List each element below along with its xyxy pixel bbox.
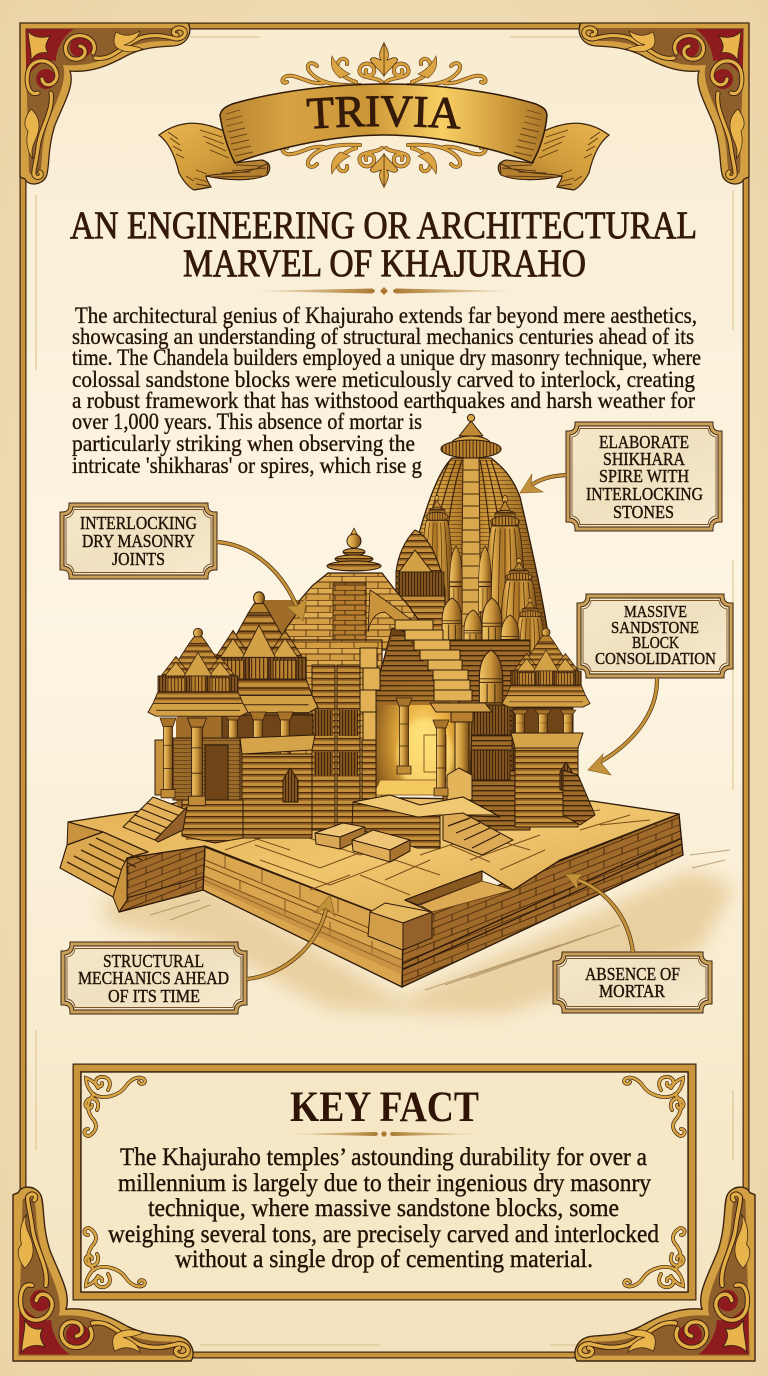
arrow: to sandstone block: [588, 678, 657, 775]
ribbon right tail: [498, 123, 609, 190]
callout: interlocking dry masonry joints: INTERLOCKING: [80, 513, 197, 533]
callout: massive sandstone block consolidation: CONSOLIDATION: [595, 649, 716, 668]
panel: key fact: [77, 1068, 692, 1296]
lower left stairs: [60, 832, 148, 912]
main shikhara spire: [396, 414, 550, 830]
stone platform: [60, 795, 683, 987]
ground shadow: [100, 850, 735, 1015]
intro paragraph: a robust framework that has withstood earthquakes and harsh weather for: [72, 388, 695, 413]
spire amalaka and finial: [441, 414, 501, 458]
callout: massive sandstone block consolidation: [579, 596, 731, 676]
left pavilions: [123, 592, 318, 843]
callout: structural mechanics: STRUCTURAL: [103, 951, 204, 971]
corner ornament: top right: [579, 23, 749, 184]
front landing and steps: [315, 795, 513, 862]
intro paragraph: over 1,000 years. This absence of mortar is: [72, 409, 422, 434]
intro paragraph: particularly striking when observing the: [72, 431, 415, 456]
pavilion stairs: [123, 797, 187, 842]
corner ornament: bottom right: [575, 1187, 755, 1361]
callout: elaborate shikhara spire: ELABORATE: [599, 432, 689, 452]
key fact corner scrolls: [84, 1077, 685, 1287]
key fact text: without a single drop of cementing material.: [175, 1246, 593, 1273]
callout: structural mechanics: OF ITS TIME: [108, 986, 200, 1006]
intro paragraph: colossal sandstone blocks were meticulously carved to interlock, creating: [72, 367, 695, 392]
temple illustration: [60, 414, 735, 1015]
right steps: [443, 813, 513, 855]
ornament above ribbon: [282, 43, 486, 85]
carved pillars: [312, 665, 360, 830]
intro paragraph: [72, 303, 701, 478]
callout: elaborate shikhara spire: INTERLOCKING: [586, 484, 703, 504]
callout: elaborate shikhara spire: STONES: [613, 502, 674, 522]
arrow: to masonry joints: [217, 542, 307, 621]
lit interior: [372, 628, 472, 795]
key fact text: weighing several tons, are precisely carved and interlocked: [108, 1221, 659, 1248]
callout: interlocking dry masonry joints: JOINTS: [112, 549, 165, 569]
key fact text: technique, where massive sandstone blocks, some: [148, 1195, 619, 1222]
callout: interlocking dry masonry joints: [62, 505, 215, 577]
loose sandstone blocks: [315, 823, 410, 862]
key fact divider: [285, 1131, 483, 1137]
arrow: to platform corner: [247, 895, 335, 979]
arrow: to spire: [520, 474, 566, 493]
spire turrets: [421, 495, 546, 683]
arrow: to stone courses: [565, 874, 633, 952]
callout: massive sandstone block consolidation: BLOCK: [632, 633, 680, 652]
key fact heading: KEY FACT: [290, 1084, 479, 1131]
callout: absence of mortar: [555, 954, 710, 1011]
callout: massive sandstone block consolidation: SANDSTONE: [611, 618, 699, 637]
callout: elaborate shikhara spire: SPIRE WITH: [599, 466, 689, 486]
ribbon main band: [220, 84, 547, 163]
key fact text: The Khajuraho temples’ astounding durability for over a: [120, 1144, 647, 1171]
callout: absence of mortar: MORTAR: [599, 981, 665, 1001]
callout: elaborate shikhara spire: [568, 424, 720, 529]
callout: structural mechanics: MECHANICS AHEAD: [78, 968, 229, 988]
ribbon left tail: [159, 123, 270, 190]
intro paragraph: intricate 'shikharas' or spires, which rise g: [72, 453, 422, 478]
callout: massive sandstone block consolidation: MASSIVE: [624, 602, 687, 621]
key fact text: millennium is largely due to their ingenious dry masonry: [118, 1170, 651, 1197]
secondary tower beside spire: [396, 530, 445, 655]
main title: [70, 204, 697, 285]
trivia ribbon banner: [158, 42, 610, 191]
ribbon title: TRIVIA: TRIVIA: [306, 96, 460, 129]
backing mass between pavilions: [176, 600, 312, 840]
right pavilion: [502, 628, 595, 827]
intro paragraph: showcasing an understanding of structural mechanics centuries ahead of its: [72, 324, 694, 349]
main title: MARVEL OF KHAJURAHO: [183, 242, 586, 285]
callout: structural mechanics: [63, 944, 245, 1012]
corner ornament: bottom left: [13, 1187, 193, 1361]
arch stepped blocks: [360, 620, 492, 800]
central shrine with cutaway arch: [285, 528, 492, 830]
ornament below ribbon: [282, 145, 486, 187]
title divider: [245, 287, 525, 295]
callout: absence of mortar: ABSENCE OF: [585, 964, 680, 984]
key fact text: [108, 1144, 659, 1273]
right arch pillars: [433, 712, 473, 800]
intro paragraph: The architectural genius of Khajuraho extends far beyond mere aesthetics,: [75, 303, 697, 328]
callout: interlocking dry masonry joints: DRY MASONRY: [82, 531, 195, 551]
callout: elaborate shikhara spire: SHIKHARA: [603, 449, 685, 469]
corner ornament: top left: [20, 23, 190, 184]
